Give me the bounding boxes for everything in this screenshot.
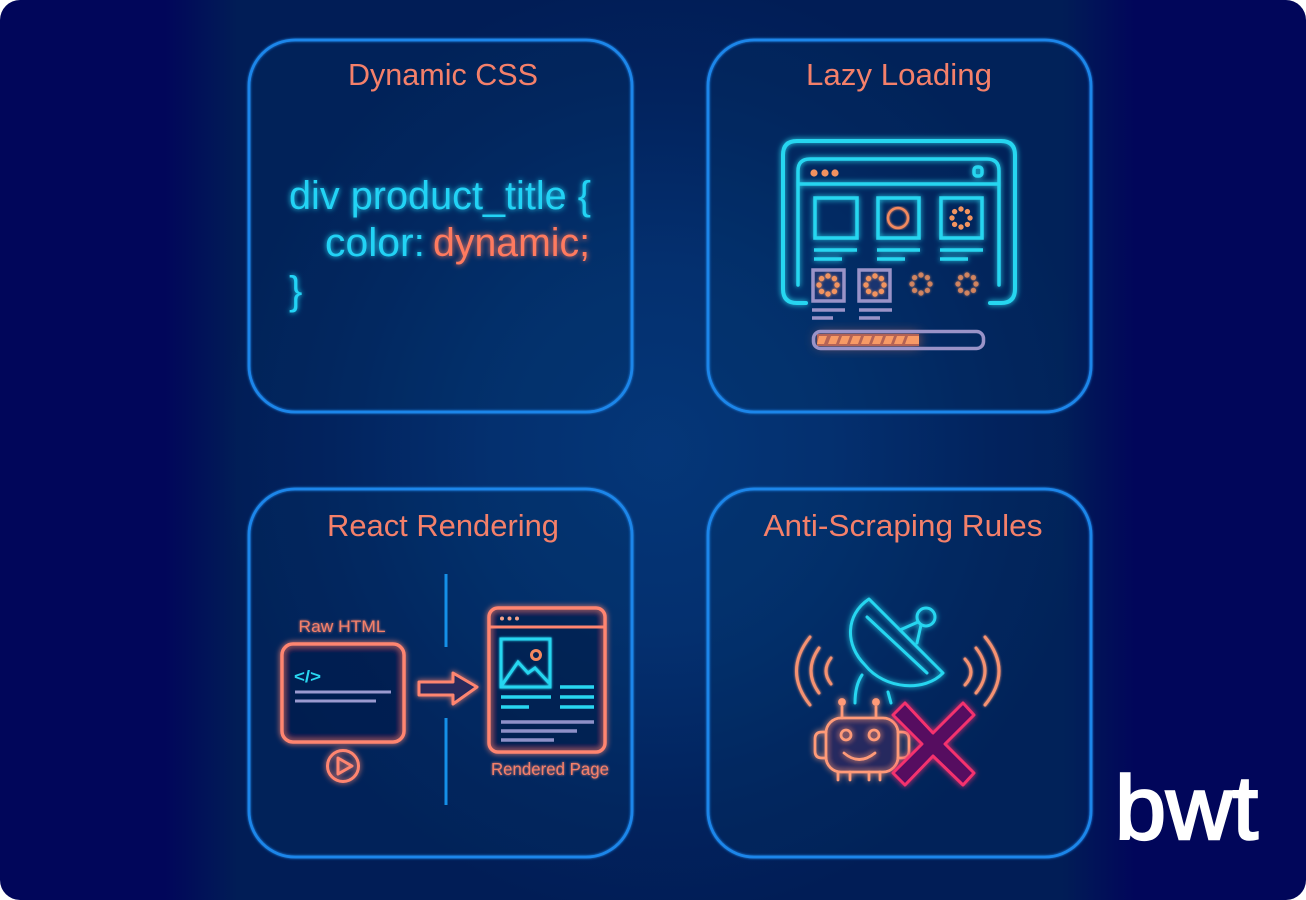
label: Rendered Page: Rendered Page — [491, 759, 609, 779]
code block — [289, 174, 591, 313]
label: Raw HTML: Raw HTML — [298, 617, 386, 636]
icon: red cross — [893, 703, 974, 785]
heading: Anti-Scraping Rules: Anti-Scraping Rules — [764, 508, 1042, 543]
panel: Anti-Scraping Rules — [708, 489, 1091, 857]
image placeholder — [501, 639, 550, 687]
icon: play button — [328, 750, 358, 782]
loading ring — [888, 208, 908, 228]
logo: bwt: bwt — [1115, 759, 1258, 859]
spinner top — [949, 206, 973, 230]
signal waves — [796, 637, 999, 705]
panel: React Rendering — [249, 489, 632, 857]
arrow — [419, 673, 477, 704]
code block: } — [289, 269, 302, 313]
progress bar — [814, 332, 984, 348]
outer frame — [783, 141, 1015, 303]
window dots — [810, 169, 839, 177]
icon: satellite dish — [850, 599, 943, 703]
placeholder tiles — [812, 270, 892, 318]
code block: div product_title { — [289, 174, 591, 218]
divider — [444, 574, 448, 805]
heading: Lazy Loading: Lazy Loading — [806, 57, 992, 92]
code tag: </> — [294, 667, 321, 686]
icon: rendered page window — [489, 608, 605, 752]
heading: Dynamic CSS: Dynamic CSS — [348, 57, 538, 92]
code block: color: — [325, 221, 425, 265]
code block: dynamic; — [433, 221, 590, 265]
panel: Dynamic CSS — [249, 40, 632, 412]
heading: React Rendering: React Rendering — [327, 508, 559, 543]
icon: raw html window — [282, 644, 404, 742]
spinners — [816, 272, 979, 297]
panel: Lazy Loading — [708, 40, 1091, 412]
icon: browser loading illustration — [783, 141, 1015, 348]
browser window — [798, 159, 999, 285]
icon: robot — [815, 700, 909, 780]
